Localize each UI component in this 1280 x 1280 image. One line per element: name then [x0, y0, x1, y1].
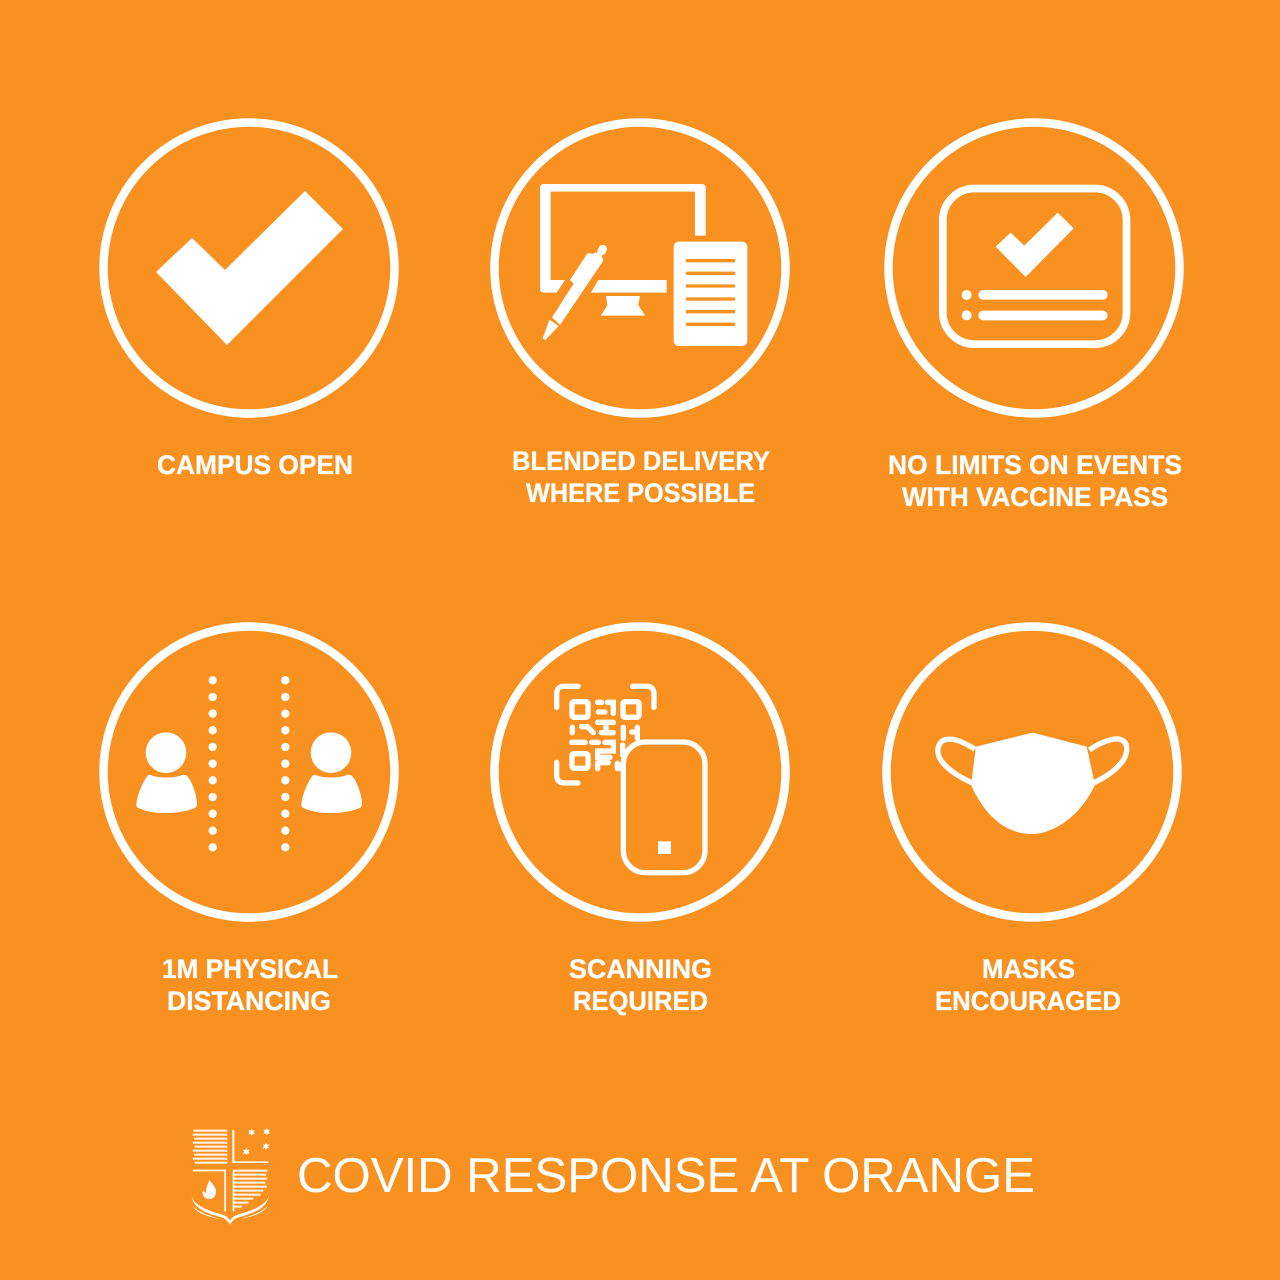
label: physical distancing: 1M PHYSICAL [162, 954, 338, 984]
label: campus open: CAMPUS OPEN [157, 450, 353, 480]
icon: QR code and phone [557, 686, 705, 873]
label: no limits on events [888, 450, 1182, 512]
label: no limits on events: WITH VACCINE PASS [902, 482, 1168, 512]
panel: no limits on events [888, 122, 1182, 512]
label: masks encouraged: MASKS [982, 954, 1075, 984]
icon: face mask [938, 733, 1127, 834]
label: blended delivery: WHERE POSSIBLE [526, 478, 755, 508]
label: physical distancing: DISTANCING [167, 986, 331, 1016]
icon: circle ring [888, 122, 1180, 414]
icon: circle ring [494, 626, 786, 918]
icon: vaccine pass card [943, 188, 1126, 344]
title: COVID RESPONSE AT ORANGE [297, 1149, 1035, 1203]
label: scanning required: REQUIRED [573, 986, 708, 1016]
label: physical distancing [162, 954, 338, 1016]
label: blended delivery: BLENDED DELIVERY [512, 446, 770, 476]
icon: circle ring [886, 626, 1178, 918]
panel: blended delivery [494, 122, 786, 508]
panel: scanning required [494, 626, 786, 1016]
label: blended delivery [512, 446, 770, 508]
label: scanning required [569, 954, 712, 1016]
logo: college crest [192, 1128, 270, 1225]
panel: campus open [104, 122, 394, 480]
label: scanning required: SCANNING [569, 954, 712, 984]
icon: two people separated by dotted lines [136, 676, 362, 851]
label: no limits on events: NO LIMITS ON EVENTS [888, 450, 1182, 480]
icon: monitor, pen and document [540, 184, 747, 346]
icon: circle ring [494, 122, 786, 414]
panel: physical distancing [104, 626, 394, 1016]
icon: circle ring [104, 122, 394, 414]
label: masks encouraged [935, 954, 1121, 1016]
icon: large check mark [156, 191, 343, 345]
panel: masks encouraged [886, 626, 1178, 1016]
icon: circle ring [104, 626, 394, 918]
label: masks encouraged: ENCOURAGED [935, 986, 1121, 1016]
